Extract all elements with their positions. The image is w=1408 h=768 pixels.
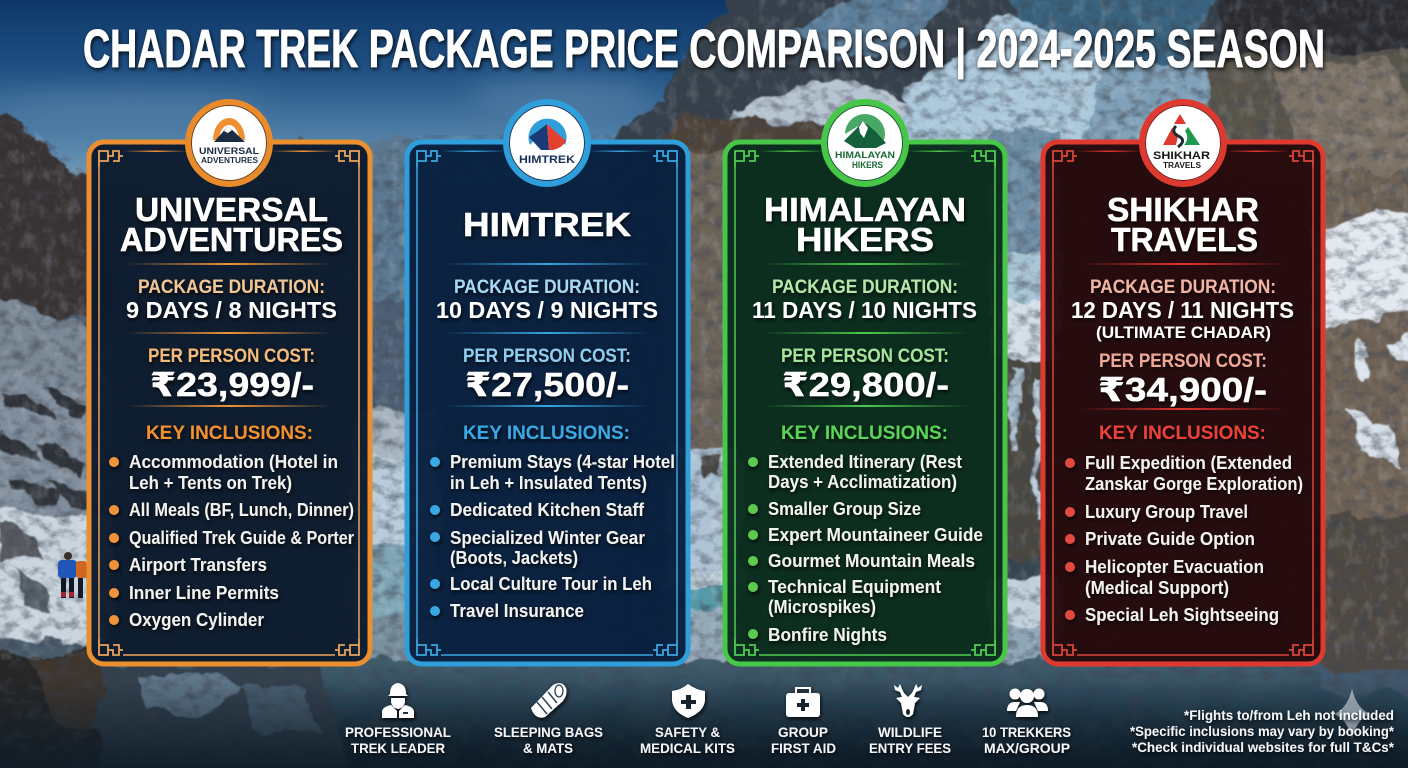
inner ornamental border [1053,150,1313,655]
logo badge: HIKERS [852,160,883,171]
package duration [126,277,337,323]
inclusions list: Smaller Group Size [768,499,921,519]
key inclusions heading: KEY INCLUSIONS: [781,423,948,444]
logo badge: HIMTREK [519,154,575,166]
package duration: 9 DAYS / 8 NIGHTS [126,297,337,323]
label: ten trekkers max per group: 10 TREKKERS [982,724,1071,740]
package duration: PACKAGE DURATION: [454,277,640,298]
panel: Universal Adventures [89,102,370,664]
label: ten trekkers max per group: MAX/GROUP [984,740,1070,756]
per person cost: PER PERSON COST: [781,346,949,367]
footnotes: *Check individual websites for full T&Cs* [1132,739,1395,755]
package duration [752,277,977,323]
company name [1107,191,1259,258]
icon: sleeping bag [531,683,567,718]
panel frame [725,142,1005,664]
company name: HIKERS [796,221,934,258]
inclusions list: Specialized Winter Gear [450,528,645,548]
label: wildlife entry fees: WILDLIFE [878,724,942,740]
company name [120,191,343,258]
logo badge [824,102,906,184]
inclusions list: Premium Stays (4-star Hotel [450,452,675,472]
icon: group of trekkers [1007,688,1048,717]
per person cost [781,346,949,403]
inner ornamental border [735,150,995,655]
panel: Himalayan Hikers [725,102,1005,664]
company name [764,191,966,258]
inclusions list: Luxury Group Travel [1085,502,1248,522]
inclusions list: Dedicated Kitchen Staff [450,500,645,520]
inclusions list: (Microspikes) [768,597,876,617]
label: professional trek leader: PROFESSIONAL [345,724,451,740]
inclusions list: Travel Insurance [450,601,584,621]
icon: safety shield [672,684,705,718]
panel frame [1043,142,1323,664]
logo badge [506,102,588,184]
label: wildlife entry fees [869,724,951,756]
label: professional trek leader [345,724,451,756]
inclusions list: Bonfire Nights [768,625,887,645]
label: professional trek leader: TREK LEADER [351,740,445,756]
inner ornamental border [417,150,677,655]
icon: trekkers on the ice [58,552,87,598]
logo badge: ADVENTURES [201,156,259,165]
label: group first aid: GROUP [778,724,828,740]
inclusions list: Airport Transfers [129,555,267,575]
per person cost: ₹29,800/- [782,366,949,403]
inclusions list: Helicopter Evacuation [1085,557,1264,577]
package duration: 11 DAYS / 10 NIGHTS [752,297,977,323]
inclusions list: Qualified Trek Guide & Porter [129,528,354,548]
inner ornamental border [99,150,359,655]
company name: UNIVERSAL [135,191,328,228]
per person cost: PER PERSON COST: [1099,351,1267,372]
per person cost [463,346,631,403]
label: group first aid [771,724,836,756]
inclusions list: Inner Line Permits [129,583,279,603]
inclusions list: Days + Acclimatization) [768,472,957,492]
panel frame [407,142,688,664]
inclusions list: Gourmet Mountain Meals [768,551,975,571]
key inclusions heading: KEY INCLUSIONS: [1099,423,1266,444]
label: sleeping bags and mats [494,724,603,756]
company name: HIMTREK [463,206,631,243]
logo badge: TRAVELS [1163,161,1202,170]
inclusions list: (Boots, Jackets) [450,548,578,568]
icon: wildlife deer [894,684,922,717]
label: wildlife entry fees: ENTRY FEES [869,740,951,756]
label: sleeping bags and mats: & MATS [523,740,573,756]
label: ten trekkers max per group [982,724,1071,756]
panel: Shikhar Travels [1043,102,1323,664]
inclusions list: Extended Itinerary (Rest [768,452,962,472]
company name: ADVENTURES [120,221,343,258]
package duration [436,277,658,323]
inclusions list: Zanskar Gorge Exploration) [1085,474,1303,494]
inclusions list: Leh + Tents on Trek) [129,473,292,493]
package duration: PACKAGE DURATION: [772,277,958,298]
key inclusions heading: KEY INCLUSIONS: [463,423,630,444]
panel: Himtrek [407,102,688,664]
logo badge: HIMALAYAN [835,150,895,161]
company name: TRAVELS [1111,221,1258,258]
per person cost: PER PERSON COST: [148,346,315,367]
icon: first aid kit [786,688,820,717]
footnotes [1130,707,1395,755]
package duration: 10 DAYS / 9 NIGHTS [436,297,658,323]
label: safety and medical kits: MEDICAL KITS [640,740,735,756]
package duration: PACKAGE DURATION: [138,277,325,298]
logo badge: SHIKHAR [1153,150,1210,162]
inclusions list [430,452,675,621]
package duration: PACKAGE DURATION: [1090,277,1276,298]
inclusions list: Full Expedition (Extended [1085,453,1292,473]
label: safety and medical kits [640,724,735,756]
company name: HIMALAYAN [764,191,966,228]
footnotes: *Specific inclusions may vary by booking* [1130,723,1395,739]
package duration [1071,277,1294,342]
inclusions list [1065,453,1303,625]
package duration: 12 DAYS / 11 NIGHTS [1071,297,1294,323]
logo badge: UNIVERSAL [199,146,259,157]
inclusions list: Technical Equipment [768,577,941,597]
inclusions list: Accommodation (Hotel in [129,452,338,472]
inclusions list: Expert Mountaineer Guide [768,525,983,545]
icon: trek leader [382,683,414,718]
package duration: (ULTIMATE CHADAR) [1096,323,1271,342]
per person cost: ₹34,900/- [1098,371,1267,408]
inclusions list [109,452,354,630]
label: group first aid: FIRST AID [771,740,836,756]
common inclusions strip [345,683,1071,756]
inclusions list [748,452,983,645]
inclusions list: Private Guide Option [1085,529,1255,549]
logo badge [188,102,270,184]
per person cost: PER PERSON COST: [463,346,631,367]
label: sleeping bags and mats: SLEEPING BAGS [494,724,603,740]
logo badge [1142,102,1224,184]
per person cost: ₹27,500/- [465,366,629,403]
key inclusions heading: KEY INCLUSIONS: [146,423,313,444]
inclusions list: (Medical Support) [1085,578,1229,598]
per person cost: ₹23,999/- [150,366,314,403]
inclusions list: in Leh + Insulated Tents) [450,473,647,493]
company name: SHIKHAR [1107,191,1259,228]
inclusions list: Local Culture Tour in Leh [450,574,652,594]
label: safety and medical kits: SAFETY & [655,724,720,740]
inclusions list: Special Leh Sightseeing [1085,605,1279,625]
inclusions list: Oxygen Cylinder [129,610,264,630]
per person cost [148,346,315,403]
per person cost [1098,351,1267,408]
panel frame [89,142,370,664]
footnotes: *Flights to/from Leh not included [1184,707,1394,723]
inclusions list: All Meals (BF, Lunch, Dinner) [129,500,354,520]
